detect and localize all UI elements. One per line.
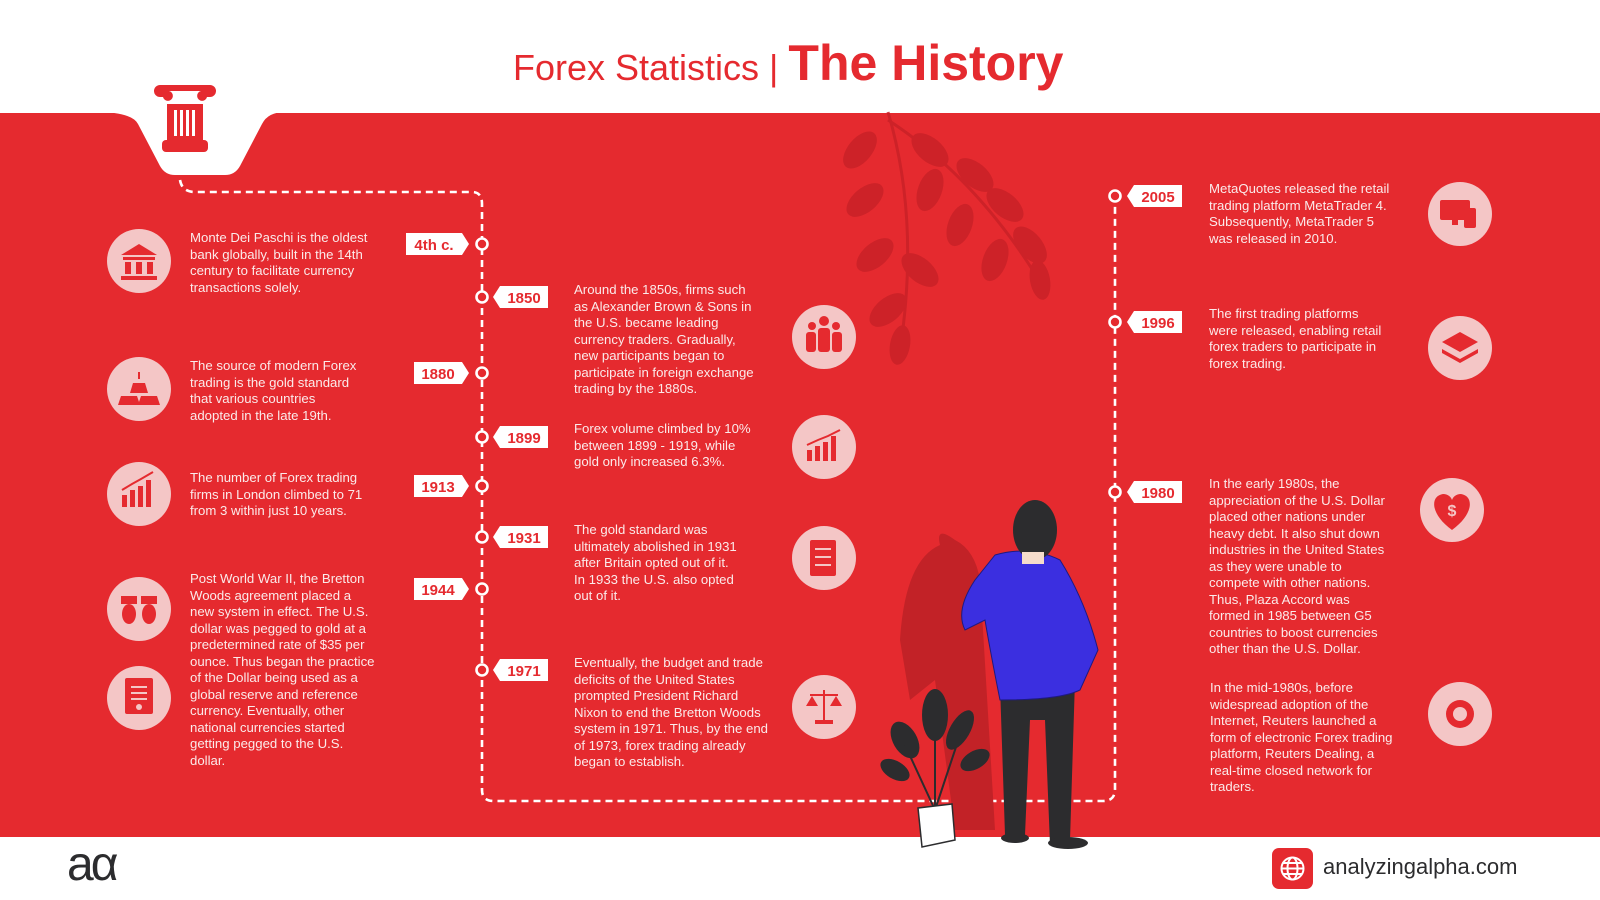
text: 1971: Eventually, the budget and trade — [574, 655, 763, 670]
text: 1899: gold only increased 6.3%. — [574, 454, 725, 469]
icon circles — [107, 182, 1492, 746]
text: $ — [1448, 503, 1457, 520]
text: 2005: Subsequently, MetaTrader 5 — [1209, 214, 1374, 229]
year labels: 1880 — [421, 366, 455, 383]
text: 1931: after Britain opted out of it. — [574, 555, 729, 570]
text: Bretton Woods: global reserve and reference — [190, 686, 358, 702]
text: 1980: heavy debt. It also shut down — [1209, 526, 1380, 540]
footer logo: aα — [67, 838, 115, 891]
year labels: 1971 — [507, 663, 541, 680]
footer website: analyzingalpha.com — [1323, 854, 1517, 879]
text: Reuters: In the mid-1980s, before — [1210, 680, 1353, 695]
year labels: 1931 — [507, 530, 541, 547]
text: 1980: In the early 1980s, the — [1209, 476, 1340, 491]
year labels — [406, 185, 1182, 681]
text: Monte Dei Paschi: bank globally, built in the 14th — [190, 246, 363, 262]
top notch with column icon — [95, 85, 285, 175]
text: 1980: placed other nations under — [1209, 509, 1365, 524]
year labels: 4th c. — [414, 237, 454, 254]
year labels: 1996 — [1141, 315, 1175, 332]
text: Bretton Woods — [190, 571, 375, 768]
text: Monte Dei Paschi: Monte Dei Paschi is the oldest — [190, 230, 367, 245]
timeline nodes — [476, 190, 1120, 676]
text: Reuters: Internet, Reuters launched a — [1210, 713, 1376, 728]
text: 1850: new participants began to — [574, 348, 724, 363]
text: 1899: Forex volume climbed by 10% — [574, 421, 751, 436]
text: Bretton Woods: national currencies started — [190, 720, 345, 734]
text: 1996: forex trading. — [1209, 356, 1286, 370]
text: 1980: Thus, Plaza Accord was — [1209, 592, 1350, 606]
text: Bretton Woods: dollar was pegged to gold at a — [190, 620, 366, 636]
text: 1971: deficits of the United States — [574, 672, 735, 686]
text: 1980: other than the U.S. Dollar. — [1209, 641, 1361, 656]
text: 1980: formed in 1985 between G5 — [1209, 608, 1372, 623]
text: Reuters — [1210, 680, 1393, 794]
text: Bretton Woods: dollar. — [190, 752, 225, 768]
text: 1980: appreciation of the U.S. Dollar — [1209, 492, 1385, 508]
year labels: 1899 — [507, 430, 541, 447]
year labels: 1850 — [507, 290, 541, 307]
text: 1980 — [1209, 476, 1385, 656]
text: 1931 — [574, 522, 737, 603]
text: Monte Dei Paschi: transactions solely. — [190, 280, 301, 294]
text: gold standard: adopted in the late 19th. — [190, 408, 332, 422]
text: Bretton Woods: new system in effect. The U.S. — [190, 604, 368, 619]
text: Bretton Woods: predetermined rate of $35 per — [190, 637, 364, 652]
decorative leaves — [837, 112, 1053, 366]
text: 1850 — [574, 282, 754, 396]
person illustration — [877, 500, 1098, 849]
text: gold standard: The source of modern Forex — [190, 358, 356, 373]
text: 1850: the U.S. became leading — [574, 315, 718, 330]
text: 1850: currency traders. Gradually, — [574, 332, 736, 346]
text: 1931: ultimately abolished in 1931 — [574, 538, 737, 554]
text: Reuters: form of electronic Forex trading — [1210, 730, 1393, 744]
text: 1899 — [574, 421, 751, 469]
text: 2005 — [1209, 181, 1389, 246]
timeline dashed path — [180, 180, 1115, 801]
text: Reuters: widespread adoption of the — [1210, 696, 1368, 712]
text: 1971: of 1973, forex trading already — [574, 738, 746, 752]
text: London firms — [190, 470, 362, 518]
year labels: 1944 — [421, 582, 455, 599]
text: 1850: trading by the 1880s. — [574, 381, 697, 396]
text: 1996: were released, enabling retail — [1209, 322, 1381, 338]
text: Bretton Woods: of the Dollar being used as a — [190, 670, 358, 685]
text: 1931: The gold standard was — [574, 522, 707, 537]
year labels: 1913 — [421, 479, 455, 496]
text: 1996 — [1209, 306, 1381, 370]
text: Bretton Woods: getting pegged to the U.S. — [190, 736, 343, 751]
text: 1971 — [574, 655, 768, 769]
text: 1996: forex traders to participate in — [1209, 339, 1376, 354]
text: 1971: began to establish. — [574, 754, 685, 769]
text: London firms: The number of Forex trading — [190, 470, 357, 485]
text: Bretton Woods: Woods agreement placed a — [190, 588, 351, 602]
text: 1980: countries to boost currencies — [1209, 624, 1378, 640]
text: Monte Dei Paschi — [190, 230, 368, 294]
text: 1931: out of it. — [574, 588, 621, 603]
text: Monte Dei Paschi: century to facilitate currency — [190, 263, 354, 278]
text: 2005: trading platform MetaTrader 4. — [1209, 198, 1387, 212]
text: Reuters: platform, Reuters Dealing, a — [1210, 746, 1374, 761]
text: Reuters: traders. — [1210, 779, 1255, 794]
title: Forex Statistics | The History — [513, 35, 1063, 91]
text: gold standard: trading is the gold standard — [190, 374, 349, 390]
text: 1971: system in 1971. Thus, by the end — [574, 721, 768, 736]
text: 1899: between 1899 - 1919, while — [574, 438, 735, 452]
year labels: 1980 — [1141, 485, 1175, 502]
footer website — [1272, 848, 1517, 889]
text: 1850: Around the 1850s, firms such — [574, 282, 746, 297]
text: gold standard — [190, 358, 356, 422]
text: 1980: as they were unable to — [1209, 558, 1342, 574]
text: 1850: participate in foreign exchange — [574, 364, 754, 380]
text: 1980: industries in the United States — [1209, 542, 1384, 557]
text: 1850: as Alexander Brown & Sons in — [574, 298, 751, 314]
text: Bretton Woods: Post World War II, the Bretton — [190, 571, 364, 586]
text: 1971: Nixon to end the Bretton Woods — [574, 704, 761, 720]
icon glyphs — [118, 200, 1478, 728]
text: Bretton Woods: currency. Eventually, other — [190, 703, 344, 718]
text: 2005: MetaQuotes released the retail — [1209, 181, 1389, 196]
text: Bretton Woods: ounce. Thus began the practice — [190, 654, 375, 668]
year labels: 2005 — [1141, 189, 1175, 206]
text: 1931: In 1933 the U.S. also opted — [574, 572, 734, 586]
text: 1996: The first trading platforms — [1209, 306, 1359, 321]
text: 1971: prompted President Richard — [574, 688, 738, 703]
text: London firms: firms in London climbed to 71 — [190, 486, 362, 502]
text: 1980: compete with other nations. — [1209, 575, 1370, 590]
text: Reuters: real-time closed network for — [1210, 762, 1372, 778]
text: gold standard: that various countries — [190, 391, 315, 406]
text: London firms: from 3 within just 10 years. — [190, 503, 347, 518]
text: 2005: was released in 2010. — [1209, 230, 1337, 246]
